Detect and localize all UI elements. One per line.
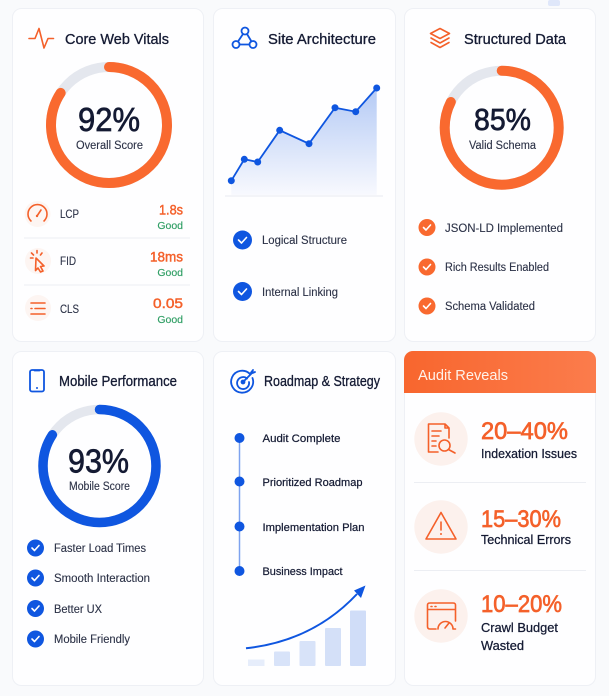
- check item: Internal Linking: Internal Linking: [262, 287, 338, 299]
- metric: LCP: LCP: [60, 209, 79, 221]
- finding: crawl budget wasted: Wasted: [481, 639, 524, 653]
- check item: Better UX: Better UX: [54, 604, 102, 616]
- timeline: Prioritized Roadmap: [262, 477, 362, 489]
- check item: Faster Load Times: [27, 540, 146, 556]
- metric: FID: 18ms: [150, 248, 183, 264]
- panel: Site Architecture: [214, 8, 396, 342]
- panel: Core Web Vitals: [12, 8, 204, 342]
- donut chart: 92% overall score: 92%: [78, 101, 140, 138]
- donut chart: 92% overall score: Overall Score: [76, 140, 143, 152]
- metric: LCP: [24, 201, 183, 232]
- heading: Structured Data: Structured Data: [464, 32, 567, 48]
- finding: indexation issues: Indexation Issues: [481, 447, 577, 461]
- check item: Rich Results Enabled: Rich Results Enabled: [445, 262, 549, 274]
- heading: Roadmap and Strategy: Roadmap & Strategy: [264, 374, 381, 390]
- header band: [404, 351, 596, 393]
- check item: Logical Structure: Logical Structure: [262, 235, 347, 247]
- heading: Audit Reveals: Audit Reveals: [418, 368, 508, 384]
- panel: Structured Data: [404, 8, 596, 342]
- donut chart: 93% mobile score: Mobile Score: [69, 481, 130, 493]
- check item: Faster Load Times: Faster Load Times: [54, 543, 146, 555]
- timeline: [234, 433, 364, 578]
- finding: crawl budget wasted: 10–20%: [481, 591, 562, 618]
- donut chart: 92% overall score: [51, 67, 167, 183]
- finding: technical errors: Technical Errors: [481, 533, 571, 547]
- check item: Rich Results Enabled: [418, 258, 549, 276]
- metric: CLS: Good: [157, 314, 183, 326]
- metric: CLS: [25, 295, 183, 326]
- check item: Schema Validated: [418, 298, 535, 314]
- finding: crawl budget wasted: Crawl Budget: [481, 621, 559, 635]
- icon: smartphone: [30, 370, 44, 392]
- donut chart: 85% valid schema: [445, 71, 559, 185]
- timeline: Audit Complete: [262, 433, 340, 445]
- panel: Audit Reveals: [404, 351, 596, 686]
- area line chart: [225, 84, 383, 196]
- metric: CLS: CLS: [60, 304, 79, 316]
- check item: Schema Validated: Schema Validated: [445, 301, 535, 313]
- check item: JSON-LD Implemented: [418, 219, 563, 236]
- icon: target with arrow: [231, 370, 255, 393]
- metric: LCP: 1.8s: [159, 202, 183, 218]
- donut chart: 93% mobile score: 93%: [68, 442, 129, 480]
- check item: JSON-LD Implemented: JSON-LD Implemented: [445, 223, 563, 235]
- finding: technical errors: 15–30%: [481, 506, 561, 533]
- finding: technical errors: [414, 500, 571, 554]
- finding: crawl budget wasted: [414, 589, 562, 653]
- panel: Roadmap and Strategy: [214, 352, 396, 686]
- check item: Logical Structure: [233, 230, 347, 250]
- metric: FID: Good: [157, 267, 183, 279]
- icon: network nodes: [232, 28, 256, 48]
- donut chart: 85% valid schema: 85%: [474, 102, 531, 137]
- finding: indexation issues: [414, 412, 577, 466]
- icon: pulse: [29, 28, 54, 48]
- donut chart: 93% mobile score: [43, 410, 156, 522]
- heading: Site Architecture: Site Architecture: [268, 32, 376, 48]
- metric: FID: [25, 248, 183, 279]
- check item: Mobile Friendly: [27, 630, 130, 648]
- metric: LCP: Good: [157, 220, 183, 232]
- icon: layers: [430, 28, 450, 48]
- metric: FID: FID: [60, 256, 76, 268]
- timeline: Business Impact: [262, 566, 342, 578]
- check item: Smooth Interaction: [27, 570, 150, 586]
- check item: Smooth Interaction: Smooth Interaction: [54, 573, 150, 585]
- heading: Core Web Vitals: Core Web Vitals: [65, 32, 169, 48]
- donut chart: 85% valid schema: Valid Schema: [469, 140, 537, 152]
- heading: Mobile Performance: Mobile Performance: [59, 374, 177, 390]
- check item: Mobile Friendly: Mobile Friendly: [54, 634, 130, 646]
- check item: Internal Linking: [233, 282, 338, 301]
- check item: Better UX: [27, 600, 102, 617]
- metric: CLS: 0.05: [153, 295, 183, 311]
- growth bars with arrow: [246, 586, 366, 666]
- panel: Mobile Performance: [12, 352, 204, 686]
- timeline: Implementation Plan: [262, 522, 364, 534]
- finding: indexation issues: 20–40%: [481, 418, 568, 445]
